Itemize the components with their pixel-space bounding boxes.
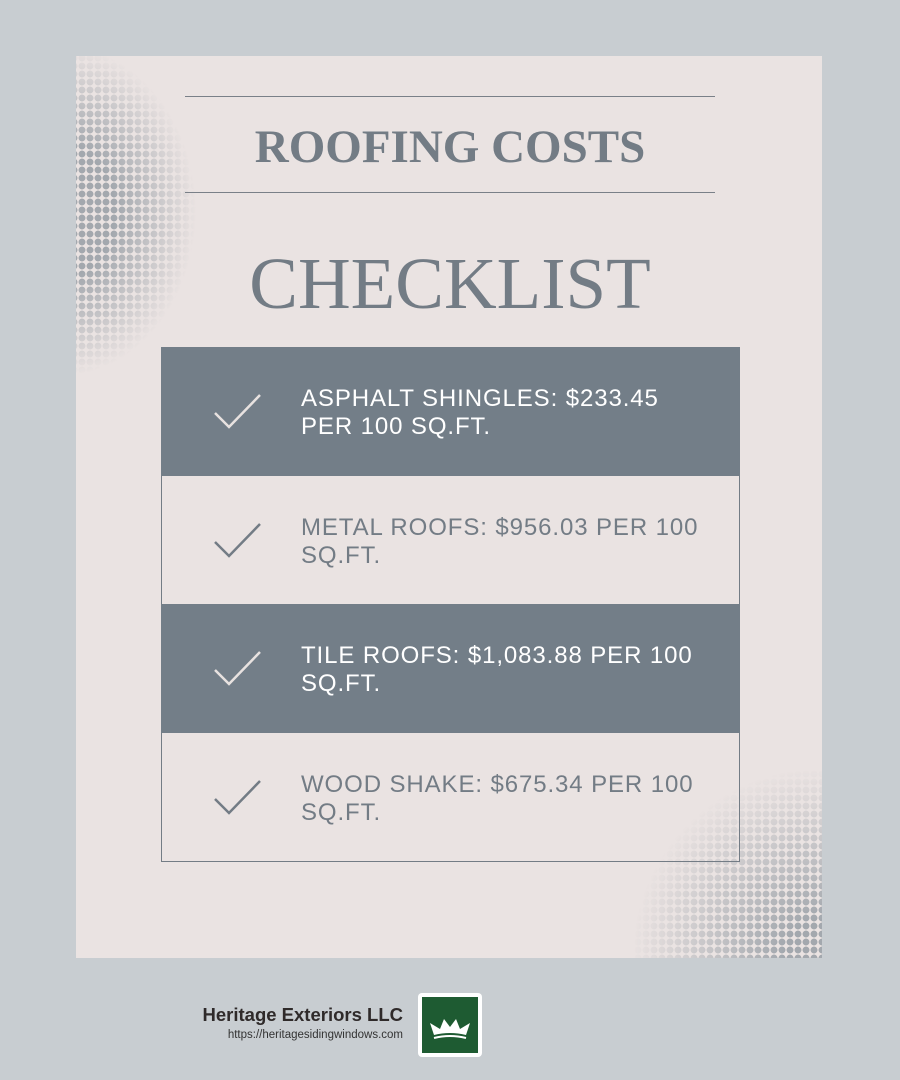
row: asphalt: ASPHALT SHINGLES: $233.45 — [301, 385, 659, 412]
row: metal: METAL ROOFS: $956.03 PER 100 — [301, 514, 698, 541]
row: wood: WOOD SHAKE: $675.34 PER 100 — [301, 771, 693, 798]
row: asphalt: PER 100 SQ.FT. — [301, 413, 491, 440]
panel: card — [76, 56, 822, 958]
row: tile — [161, 604, 740, 733]
row: wood: SQ.FT. — [301, 799, 381, 826]
row: metal: SQ.FT. — [301, 542, 381, 569]
title: ROOFING COSTS — [255, 121, 645, 173]
row: tile: TILE ROOFS: $1,083.88 PER 100 — [301, 642, 693, 669]
icon: logo — [418, 993, 482, 1057]
checklist — [161, 347, 740, 862]
footer: company — [203, 1004, 403, 1041]
row: tile: SQ.FT. — [301, 670, 381, 697]
footer: company: Heritage Exteriors LLC — [203, 1004, 403, 1025]
row: metal — [214, 514, 698, 569]
row: wood — [214, 771, 693, 826]
subtitle: CHECKLIST — [249, 243, 651, 324]
footer: company: https://heritagesidingwindows.com — [228, 1029, 403, 1041]
row: asphalt — [161, 347, 740, 476]
